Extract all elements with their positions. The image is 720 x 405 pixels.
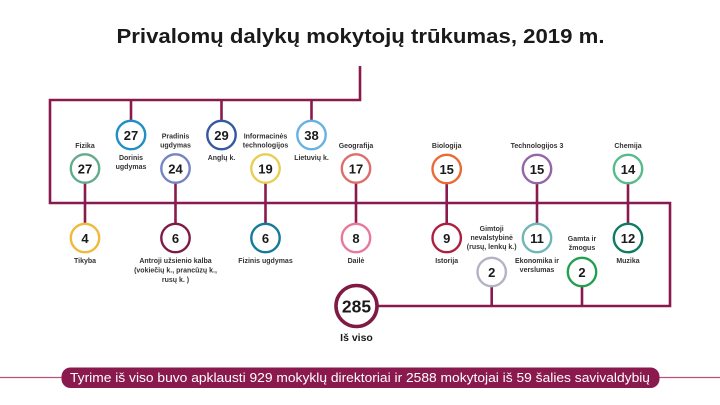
node: Geografija 17: Geografija [339,143,373,150]
node: Muzika 12: Muzika [616,258,640,265]
connector line network [50,66,670,306]
node: Lietuvių k. 38 [294,121,329,162]
node: Dailė 8: 8 [352,231,360,246]
footer rule [0,376,720,378]
node: Muzika 12 [614,224,642,265]
node: Chemija 14 [614,143,642,183]
node: Gamta ir žmogus 2: Gamta ir [568,236,596,243]
node: Chemija 14: 14 [621,162,636,177]
node: Technologijos 3 15: Technologijos 3 [511,143,563,150]
node: Dailė 8: Dailė [348,258,364,265]
node: Ekonomika ir verslumas 11 [515,224,559,274]
node: Geografija 17: 17 [349,162,363,176]
node: Gimtoji nevalstybinė 2: 2 [488,265,495,280]
node: Anglų k. 29: 29 [214,128,229,143]
node: Technologijos 3 15: 15 [530,162,544,177]
node: Fizika 27: 27 [78,162,92,176]
node: Fizika 27: Fizika [75,143,95,150]
node: Lietuvių k. 38: 38 [304,128,319,143]
total: 285 Iš viso [336,286,377,344]
node: Tikyba 4: 4 [81,231,89,246]
node: Ekonomika ir verslumas 11: 11 [530,231,544,246]
node: Istorija 9: Istorija [435,258,458,265]
total: 285 Iš viso: Iš viso [340,332,373,344]
node: Gamta ir žmogus 2: žmogus [569,245,595,252]
node: Antroji užsienio kalba 6: 6 [172,231,179,246]
node: Pradinis ugdymas 24: Pradinis [162,134,189,140]
node: Gimtoji nevalstybinė 2: (rusų, lenkų k.) [467,244,517,251]
node: Dorinis ugdymas 27: ugdymas [116,164,146,171]
node: Ekonomika ir verslumas 11: Ekonomika ir [515,258,559,265]
node: Muzika 12: 12 [621,231,635,246]
node: Fizika 27 [71,143,99,183]
node: Ekonomika ir verslumas 11: verslumas [520,267,554,274]
node: Pradinis ugdymas 24: 24 [168,162,183,176]
node: Informacinės technologijos 19: 19 [258,162,273,176]
node: Technologijos 3 15 [511,143,563,183]
node: Dorinis ugdymas 27: Dorinis [119,155,143,162]
node: Antroji užsienio kalba 6 [134,224,217,284]
node: Lietuvių k. 38: Lietuvių k. [294,155,329,162]
node: Dailė 8 [342,224,370,265]
node: Anglų k. 29: Anglų k. [208,155,235,162]
node: Antroji užsienio kalba 6: rusų k. ) [162,277,189,284]
footer banner: Tyrime iš viso buvo apklausti 929 mokyklų direktoriai ir 2588 mokytojai iš 59 šalies savivaldybių [70,370,650,385]
footer banner [62,368,660,388]
node: Informacinės technologijos 19: technologijos [243,142,288,150]
node: Biologija 15 [432,143,462,183]
node: Fizinis ugdymas 6: 6 [262,231,269,246]
node: Antroji užsienio kalba 6: (vokiečių k., prancūzų k., [134,268,217,274]
node: Anglų k. 29 [207,121,236,162]
node: Dorinis ugdymas 27: 27 [124,128,138,143]
node: Antroji užsienio kalba 6: Antroji užsienio kalba [139,258,212,265]
node: Gimtoji nevalstybinė 2: Gimtoji [480,226,504,233]
node: Pradinis ugdymas 24: ugdymas [160,142,191,150]
title: Privalomų dalykų mokytojų trūkumas, 2019 m. [116,26,604,48]
node: Tikyba 4: Tikyba [74,258,96,265]
node: Gamta ir žmogus 2: 2 [578,265,586,280]
node: Informacinės technologijos 19 [243,134,288,183]
total: 285 Iš viso: 285 [342,296,371,316]
node: Biologija 15: Biologija [432,143,462,150]
node: Gamta ir žmogus 2 [568,236,596,286]
node: Istorija 9: 9 [443,231,450,246]
node: Tikyba 4 [71,224,99,265]
node: Pradinis ugdymas 24 [160,134,191,183]
node: Dorinis ugdymas 27 [116,121,146,171]
node: Gimtoji nevalstybinė 2: nevalstybinė [470,235,513,242]
node: Fizinis ugdymas 6 [238,224,293,265]
node: Gimtoji nevalstybinė 2 [467,226,517,286]
node: Istorija 9 [432,224,461,265]
node: Geografija 17 [339,143,373,183]
node: Chemija 14: Chemija [614,143,642,150]
node: Informacinės technologijos 19: Informacinės [244,134,287,140]
node: Fizinis ugdymas 6: Fizinis ugdymas [238,258,293,265]
node: Biologija 15: 15 [439,162,454,177]
